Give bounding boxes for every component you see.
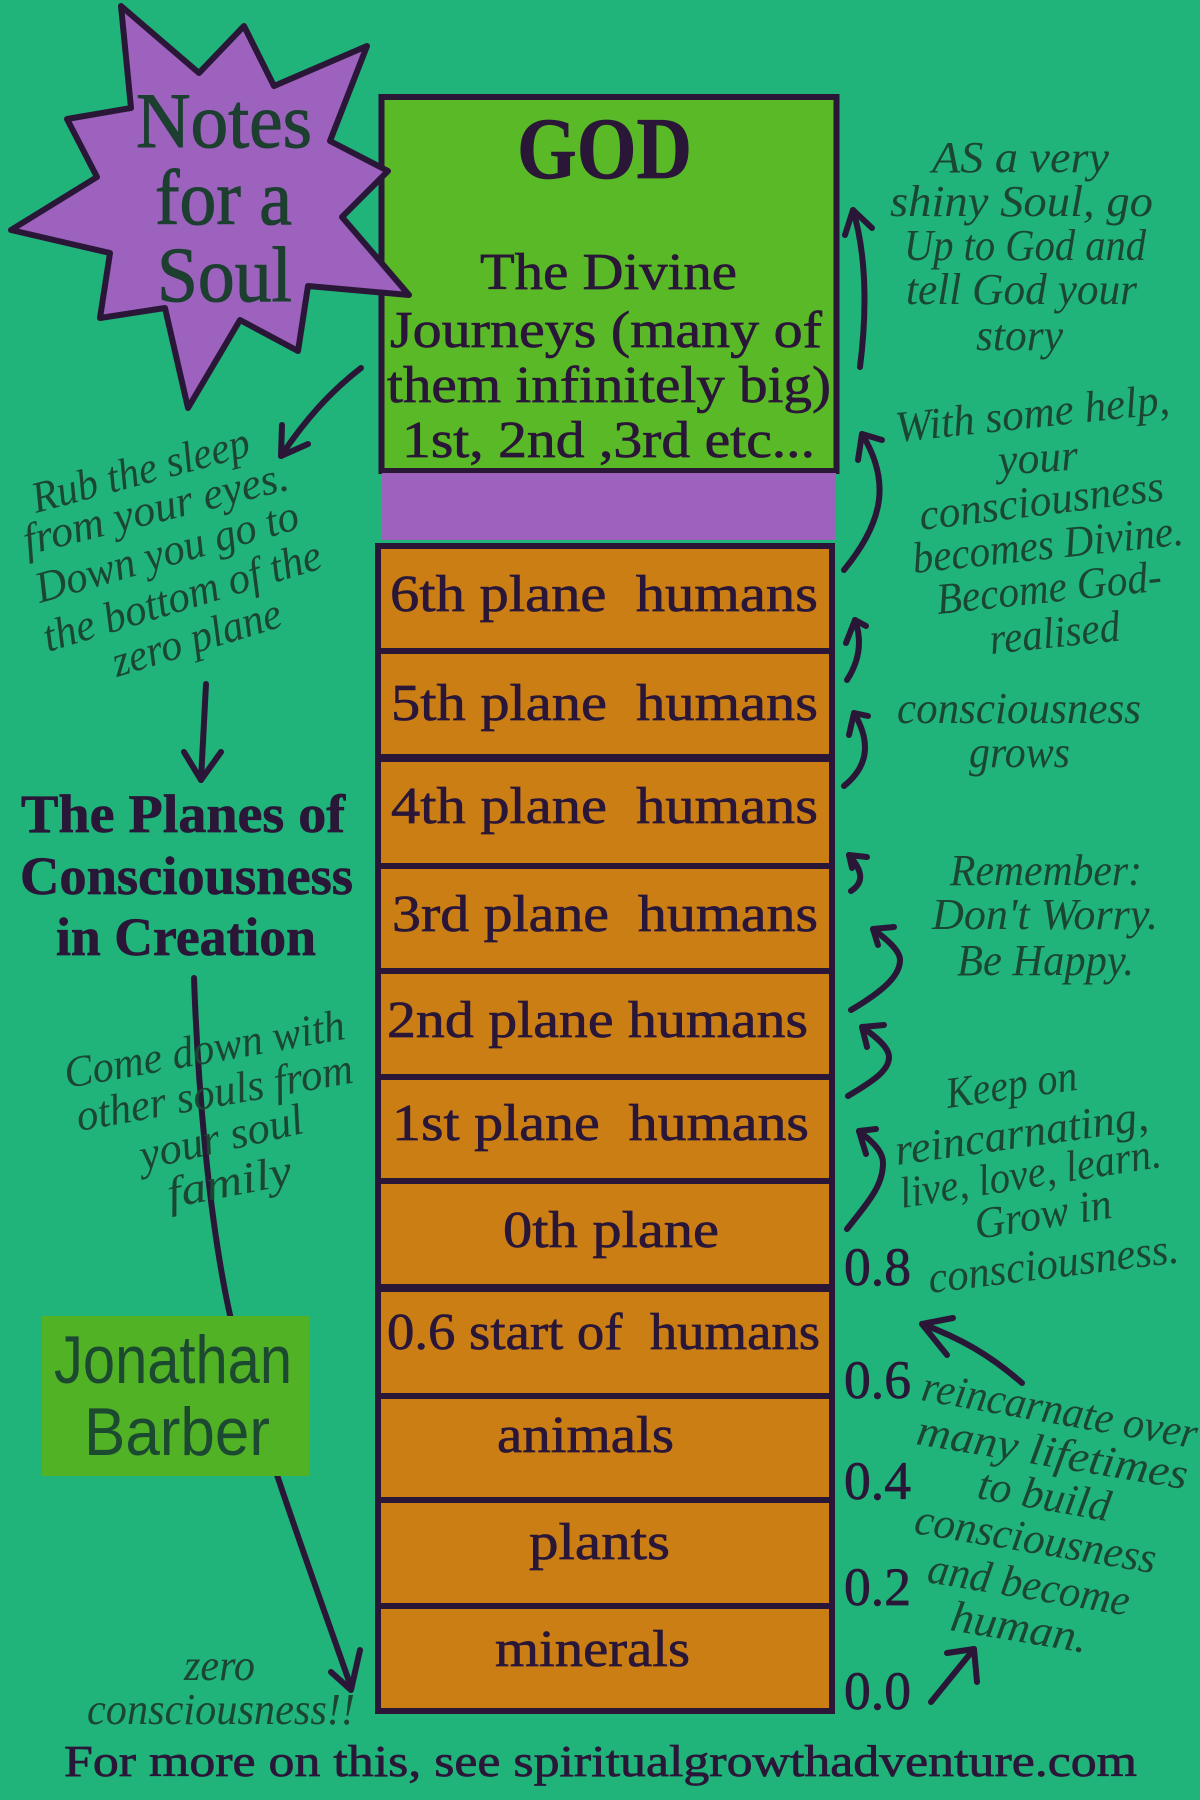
note: shiny soul: AS a very: [929, 133, 1109, 182]
star badge: Notes for a Soul: Notes: [136, 77, 312, 164]
note: reincarnate over many lifetimes: consciousness: [911, 1495, 1160, 1583]
note: with some help: realised: [987, 601, 1123, 664]
note: rub the sleep: zero plane: [105, 589, 287, 687]
row: start of humans: 0.6 start of humans: [387, 1304, 820, 1361]
text: divine journeys: 1st, 2nd ,3rd etc...: [402, 412, 815, 469]
scale numbers: 0.0: [844, 1661, 911, 1721]
row: animals: [378, 1396, 832, 1500]
text: divine journeys: [387, 244, 831, 469]
note: with some help: [893, 374, 1186, 664]
row: 0th plane: [378, 1181, 832, 1288]
note: consciousness grows: grows: [969, 728, 1070, 777]
note: reincarnate over many lifetimes: and become: [924, 1544, 1134, 1626]
heading: GOD: GOD: [517, 101, 692, 198]
note: keep on reincarnating: Grow in: [971, 1179, 1115, 1249]
star badge: Notes for a Soul: [11, 6, 409, 408]
note: keep on reincarnating: reincarnating,: [892, 1091, 1151, 1175]
note: rub the sleep: the bottom of the: [37, 530, 327, 662]
note: rub the sleep: Rub the sleep: [25, 417, 255, 523]
note: consciousness grows: consciousness: [897, 684, 1141, 733]
heading: The Planes of Consciousness in Creation: in Creation: [56, 907, 316, 967]
author badge: Jonathan Barber: Jonathan: [54, 1322, 292, 1398]
row: start of humans: [378, 1288, 832, 1396]
note: come down with other souls: Come down with: [60, 1000, 348, 1098]
arrow: 4th to 5th plane: [844, 713, 868, 786]
note: shiny soul: shiny Soul, go: [890, 177, 1153, 226]
row: 1st plane: [378, 1077, 832, 1181]
text: divine journeys: The Divine: [480, 244, 737, 301]
arrow: long descent to zero consciousness: [194, 978, 360, 1690]
note: zero consciousness: [87, 1641, 355, 1734]
row: minerals: minerals: [495, 1621, 690, 1678]
arrow: minerals upward: [931, 1649, 977, 1702]
note: come down with other souls: your soul: [130, 1094, 308, 1181]
row: plants: [378, 1500, 832, 1606]
arrow: from star down to note: [281, 368, 361, 456]
panel: GOD box: [382, 97, 836, 471]
heading: The Planes of Consciousness in Creation: Consciousness: [20, 846, 353, 906]
row: 6th plane: [378, 546, 832, 651]
heading: The Planes of Consciousness in Creation: The Planes of: [21, 784, 346, 844]
row: 1st plane: 1st plane humans: [392, 1095, 809, 1152]
note: come down with other souls: other souls from: [72, 1044, 356, 1141]
note: rub the sleep: [18, 417, 327, 687]
note: shiny soul: tell God your: [906, 265, 1138, 314]
scale numbers: 0.6: [844, 1350, 911, 1410]
note: keep on reincarnating: Keep on: [942, 1051, 1080, 1118]
row: 2nd plane: [378, 971, 832, 1077]
note: reincarnate over many lifetimes: [911, 1362, 1200, 1663]
row: 6th plane: 6th plane humans: [390, 566, 818, 623]
row: 4th plane: [378, 758, 832, 866]
note: with some help: your: [992, 430, 1080, 485]
row: 4th plane: 4th plane humans: [391, 778, 818, 835]
row: animals: animals: [497, 1407, 674, 1464]
note: rub the sleep: Down you go to: [28, 491, 304, 613]
row: 0th plane: 0th plane: [503, 1202, 719, 1259]
row: 5th plane: [378, 651, 832, 758]
arrow: reincarnate upward: [922, 1318, 1022, 1383]
note: with some help: consciousness: [916, 461, 1166, 540]
footer: For more on this, see spiritualgrowthadventure.com: [64, 1737, 1137, 1786]
author badge: Jonathan Barber: Barber: [84, 1394, 270, 1470]
note: zero consciousness: consciousness!!: [87, 1685, 355, 1734]
note: remember: Be Happy.: [957, 936, 1134, 985]
arrow: 6th plane to divine: [844, 434, 882, 570]
panel: planes column: [378, 546, 832, 1711]
scale numbers: 0.2: [844, 1557, 911, 1617]
scale numbers: 0.8: [844, 1237, 911, 1297]
note: with some help: With some help,: [893, 374, 1172, 452]
row: 3rd plane: [378, 866, 832, 971]
author badge: Jonathan Barber: [42, 1316, 309, 1476]
panel: purple band: [382, 473, 836, 540]
note: keep on reincarnating: live, love, learn.: [896, 1128, 1164, 1218]
scale numbers: 0.4: [844, 1451, 911, 1511]
arrow: 1st to 2nd plane: [848, 1025, 889, 1096]
scale numbers: [844, 1237, 911, 1721]
row: 2nd plane: 2nd plane humans: [387, 992, 808, 1049]
note: with some help: becomes Divine.: [910, 506, 1186, 583]
note: rub the sleep: from your eyes.: [18, 451, 293, 565]
star badge: Notes for a Soul: Soul: [157, 231, 292, 318]
arrow: 3rd to 4th plane: [849, 855, 867, 891]
note: reincarnate over many lifetimes: human.: [947, 1592, 1092, 1663]
note: consciousness grows: [897, 684, 1141, 777]
note: shiny soul: Up to God and: [904, 221, 1147, 270]
note: remember: Don't Worry.: [931, 890, 1158, 939]
text: divine journeys: them infinitely big): [387, 357, 831, 414]
arrow: 2nd to 3rd plane: [851, 927, 900, 1010]
note: remember: [931, 846, 1158, 985]
text: divine journeys: Journeys (many of: [390, 302, 823, 359]
note: shiny soul: story: [976, 311, 1063, 360]
note: remember: Remember:: [949, 846, 1142, 895]
note: keep on reincarnating: [892, 1051, 1181, 1303]
note: zero consciousness: zero: [183, 1641, 255, 1690]
note: shiny soul: [890, 133, 1153, 360]
note: come down with other souls: family: [163, 1146, 296, 1218]
note: reincarnate over many lifetimes: many lifetimes: [913, 1406, 1192, 1499]
arrow: 0th to 1st plane: [847, 1129, 883, 1229]
row: 3rd plane: 3rd plane humans: [392, 886, 818, 943]
arrow: down to title: [184, 684, 221, 780]
row: plants: plants: [529, 1514, 670, 1571]
note: reincarnate over many lifetimes: to build: [974, 1460, 1116, 1531]
note: come down with other souls: [60, 1000, 356, 1218]
star badge: Notes for a Soul: for a: [155, 154, 292, 241]
row: 5th plane: 5th plane humans: [391, 675, 818, 732]
note: keep on reincarnating: consciousness.: [925, 1224, 1181, 1303]
row: minerals: [378, 1606, 832, 1711]
arrow: 5th to 6th plane: [846, 620, 866, 680]
arrow: up to God: [845, 210, 872, 367]
note: with some help: Become God-: [934, 552, 1164, 624]
heading: The Planes of Consciousness in Creation: [20, 784, 353, 967]
